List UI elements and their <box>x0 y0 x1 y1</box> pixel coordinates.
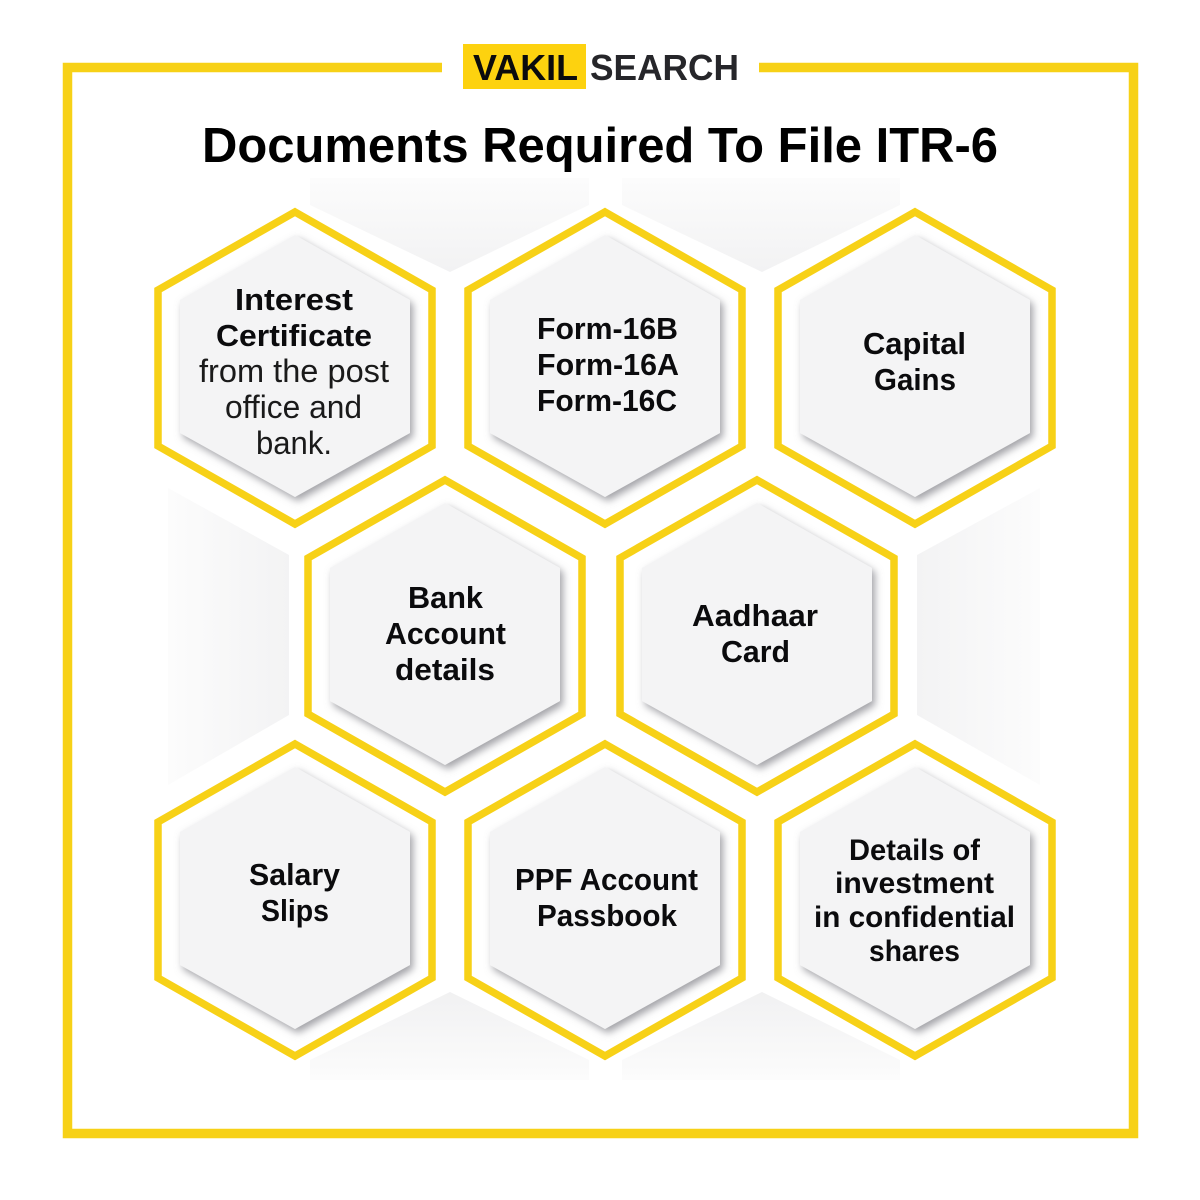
hexagon: capital gains <box>778 212 1052 524</box>
hexagon: interest certificate: Certificate <box>216 318 372 353</box>
hexagon: details of investment: in confidential <box>814 901 1015 934</box>
hexagon: ppf account passbook: Passbook <box>537 898 678 933</box>
background hexagon fragments <box>168 178 1040 1080</box>
hexagon: ppf account passbook: PPF Account <box>515 862 698 897</box>
hexagon: interest certificate: from the post <box>199 353 389 389</box>
hexagon: details of investment: shares <box>869 935 960 968</box>
hexagon: capital gains: Capital <box>863 326 966 361</box>
hexagon: salary slips: Salary <box>249 857 341 892</box>
logo: VAKIL <box>473 47 578 88</box>
hexagon: interest certificate: office and <box>225 389 362 425</box>
hexagon: details of investment: Details of <box>849 834 980 867</box>
hexagon: interest certificate: bank. <box>256 425 332 461</box>
hexagon: salary slips <box>158 744 432 1056</box>
hexagon: form 16: Form-16B <box>537 311 678 346</box>
hexagon: aadhaar card: Aadhaar <box>692 598 818 633</box>
logo <box>463 44 739 89</box>
hexagon: form 16 <box>468 212 742 524</box>
logo: SEARCH <box>590 47 739 88</box>
hexagon: bank account details: Bank <box>408 580 484 615</box>
hexagon: bank account details: Account <box>385 616 506 651</box>
hexagon: bank account details: details <box>395 652 495 687</box>
hexagon: details of investment: investment <box>835 867 994 900</box>
hexagon: ppf account passbook <box>468 744 742 1056</box>
yellow frame <box>68 68 1134 1134</box>
hexagon: bank account details <box>308 480 582 792</box>
hexagon: form 16: Form-16C <box>537 383 677 418</box>
hexagon: interest certificate: Interest <box>235 282 353 317</box>
hexagon: aadhaar card <box>620 480 894 792</box>
hexagon: salary slips: Slips <box>261 893 329 928</box>
hexagon: details of investment <box>778 744 1052 1056</box>
hexagon: capital gains: Gains <box>874 362 956 397</box>
hexagon: form 16: Form-16A <box>537 347 679 382</box>
hexagon: interest certificate <box>158 212 432 524</box>
title: Documents Required To File ITR-6 <box>202 119 998 173</box>
hexagon: aadhaar card: Card <box>721 634 790 669</box>
